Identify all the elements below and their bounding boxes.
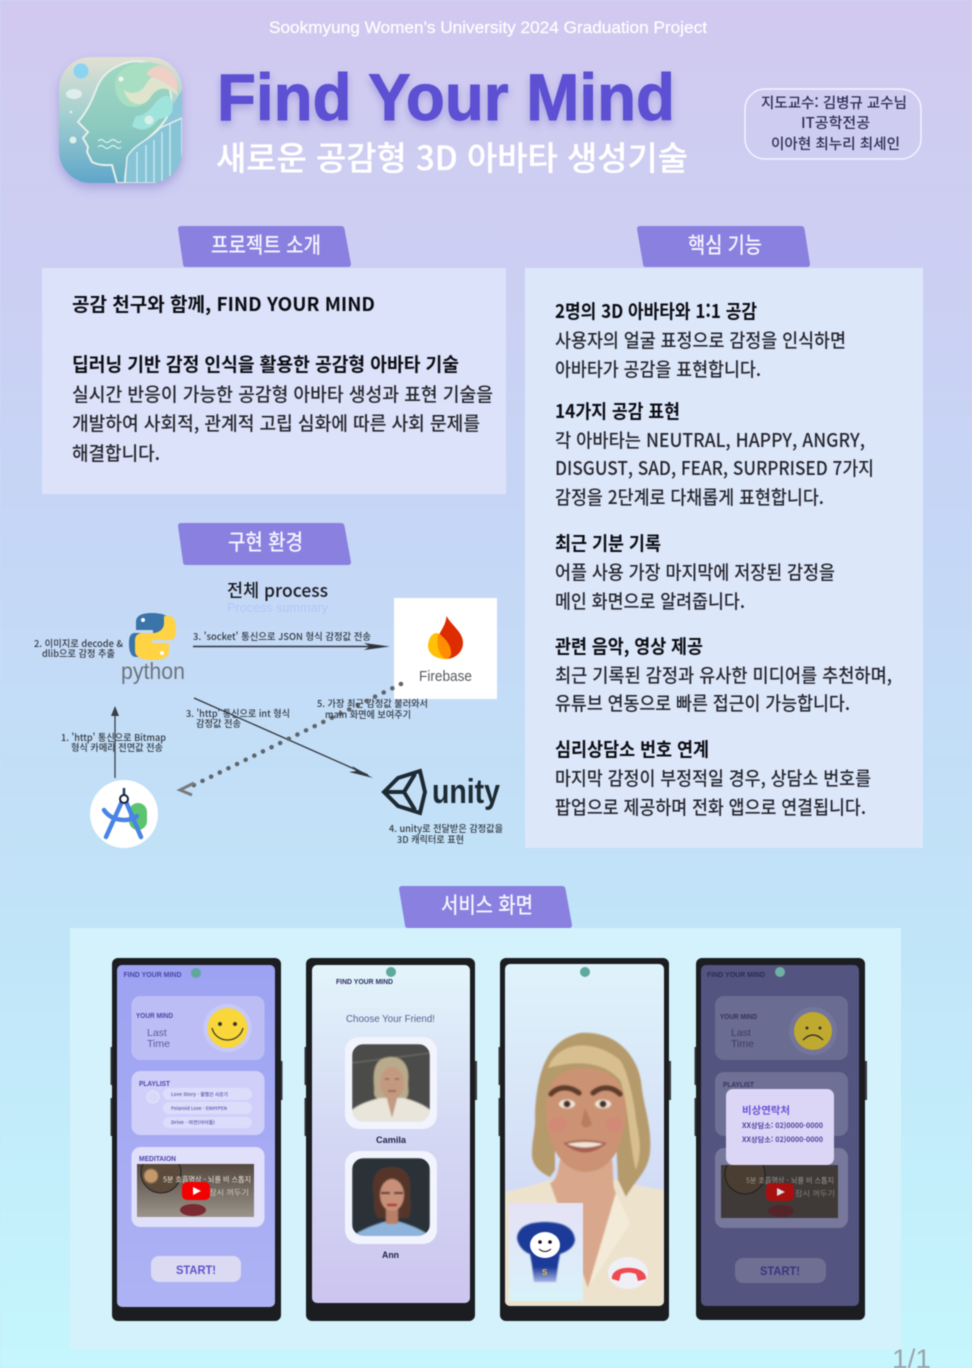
heading tab: implementation environment: 구현 환경 — [228, 525, 303, 557]
phone 4: emergency contact popup: FIND YOUR MIND — [707, 972, 765, 979]
card: your mind dimmed — [715, 996, 848, 1060]
panel: key features: 심리상담소 번호 연계 — [555, 735, 709, 762]
self-view with mascot — [509, 1203, 583, 1301]
panel: key features: 2명의 3D 아바타와 1:1 공감 — [555, 297, 757, 324]
panel: project intro: 개발하여 사회적, 관계적 고립 심화에 따른 사회 문제를 — [72, 409, 480, 436]
card: playlist — [132, 1071, 264, 1135]
card: your mind: Last — [147, 1027, 167, 1039]
panel: key features — [525, 268, 923, 848]
advisor and team box: IT공학전공 — [801, 112, 870, 133]
self-view with mascot: S — [542, 1268, 548, 1277]
label: decode — [34, 636, 123, 660]
video thumbnail: 잠시 꺼두기 — [209, 1187, 249, 1198]
heading tab: service screens — [399, 886, 572, 928]
panel: key features: 사용자의 얼굴 표정으로 감정을 인식하면 — [555, 326, 846, 353]
card: meditation: MEDITAION — [139, 1156, 176, 1163]
card: meditation dimmed: 5분 호흡명상 - 뇌를 비 스톱지 — [746, 1175, 834, 1186]
popup: emergency contacts: XX상담소: 02)0000-0000 — [742, 1135, 823, 1145]
heading tab: implementation environment — [178, 523, 351, 565]
card: playlist: PLAYLIST — [139, 1081, 171, 1088]
card: meditation dimmed: 잠시 꺼두기 — [795, 1188, 835, 1199]
card: your mind: YOUR MIND — [136, 1013, 173, 1020]
panel: key features: 감정을 2단계로 다채롭게 표현합니다. — [555, 483, 824, 510]
heading tab: project intro — [178, 226, 351, 267]
panel: key features: 아바타가 공감을 표현합니다. — [555, 355, 761, 382]
avatar — [505, 1033, 664, 1306]
diagram heading: 전체 process — [227, 577, 328, 603]
label: Ann: Ann — [382, 1250, 399, 1260]
button: end call — [608, 1257, 648, 1289]
label: bitmap: 형식 카메라 전면값 전송 — [71, 740, 163, 754]
card: playlist: Drive - 미연(아이들) — [171, 1119, 215, 1126]
panel: project intro: 딥러닝 기반 감정 인식을 활용한 공감형 아바타 기술 — [72, 350, 459, 377]
advisor and team box — [745, 89, 921, 159]
label: Camila: Camila — [376, 1135, 407, 1145]
panel: project intro: 실시간 반응이 가능한 공감형 아바타 생성과 표현 기술을 — [72, 380, 493, 407]
heading tab: service screens: 서비스 화면 — [441, 888, 533, 920]
panel: project intro — [42, 268, 506, 494]
card: meditation dimmed — [715, 1148, 848, 1228]
label: latest value: main 화면에 보여주기 — [325, 707, 411, 721]
heading tab: key features — [637, 226, 810, 267]
popup: emergency contacts: 비상연락처 — [742, 1102, 790, 1117]
diagram: overall process — [34, 577, 503, 848]
panel: service screens — [70, 928, 901, 1350]
arrow: android to python — [111, 706, 119, 778]
icon: android studio — [90, 780, 158, 848]
avatar card: Camila — [345, 1037, 437, 1129]
diagram subheading: Process summary — [227, 600, 328, 615]
label: decode: dlib으로 감정 추출 — [42, 646, 115, 660]
panel: key features: 최근 기분 기록 — [555, 529, 661, 556]
video thumbnail — [136, 1163, 255, 1218]
label: unity expression — [389, 821, 503, 846]
label: http int: 감정값 전송 — [196, 716, 241, 730]
label: unity expression: 3D 캐릭터로 표현 — [397, 832, 464, 846]
card: your mind dimmed: Last — [731, 1027, 751, 1039]
advisor and team box: 이아현 최누리 최세인 — [771, 133, 900, 154]
arrow: python to unity — [194, 698, 373, 778]
arrow: python to firebase — [193, 643, 390, 650]
phone 2: choose friend: FIND YOUR MIND — [336, 979, 393, 986]
phone 2: choose friend: Choose Your Friend! — [346, 1014, 435, 1025]
popup: emergency contacts: XX상담소: 02)0000-0000 — [742, 1121, 823, 1131]
card: your mind: Time — [147, 1038, 170, 1050]
panel: project intro: 공감 천구와 함께, FIND YOUR MIND — [72, 290, 375, 317]
card: meditation — [132, 1147, 264, 1227]
label: http int — [186, 706, 290, 730]
card: playlist: Polaroid Love - ENHYPEN — [171, 1105, 227, 1112]
panel: key features: 마지막 감정이 부정적일 경우, 상담소 번호를 — [555, 764, 871, 791]
icon: firebase: Firebase — [419, 669, 472, 685]
icon: app logo with head profile — [59, 57, 182, 183]
label: bitmap: 1. 'http' 통신으로 Bitmap — [61, 730, 166, 744]
icon: firebase — [394, 598, 497, 699]
title: Find Your Mind — [217, 60, 675, 134]
card: your mind — [132, 996, 264, 1060]
phone 2: choose friend — [304, 958, 477, 1321]
panel: key features: 각 아바타는 NEUTRAL, HAPPY, ANGRY, — [555, 426, 865, 453]
panel: key features: 최근 기록된 감정과 유사한 미디어를 추천하며, — [555, 661, 892, 688]
panel: key features: 14가지 공감 표현 — [555, 397, 680, 424]
panel: key features: 유튜브 연동으로 빠른 접근이 가능합니다. — [555, 689, 850, 716]
panel: key features: 메인 화면으로 알려줍니다. — [555, 587, 745, 614]
panel: key features: 어플 사용 가장 마지막에 저장된 감정을 — [555, 558, 835, 585]
card: playlist dimmed — [715, 1072, 848, 1136]
popup: emergency contacts — [726, 1089, 834, 1165]
panel: key features: 팝업으로 제공하며 전화 앱으로 연결됩니다. — [555, 793, 866, 820]
card: playlist: Love Story - 볼빨간 사춘기 — [171, 1091, 228, 1098]
label: latest value: 5. 가장 최근 감정값 불러와서 — [317, 696, 428, 710]
arrow: firebase to android dotted — [180, 684, 401, 795]
button: start dimmed: START! — [760, 1264, 800, 1278]
icon: unity: unity — [432, 773, 500, 811]
card: playlist dimmed: PLAYLIST — [723, 1082, 755, 1089]
panel: key features: 관련 음악, 영상 제공 — [555, 632, 703, 659]
panel: key features: DISGUST, SAD, FEAR, SURPRISED 7가지 — [555, 454, 874, 481]
icon: python — [121, 613, 185, 684]
label: decode: 2. 이미지로 decode & — [34, 636, 123, 650]
button: start — [151, 1256, 241, 1282]
phone 1: main screen — [110, 958, 282, 1321]
button: start: START! — [176, 1263, 216, 1277]
label: bitmap — [61, 730, 166, 754]
avatar card: Ann — [345, 1151, 437, 1244]
button: start dimmed — [735, 1258, 826, 1283]
header: project caption: Sookmyung Women's University 2024 Graduation Project — [269, 19, 707, 37]
phone 3: avatar video call — [498, 958, 671, 1321]
heading tab: project intro: 프로젝트 소개 — [211, 228, 321, 260]
panel: project intro: 해결합니다. — [72, 439, 160, 466]
label: unity expression: 4. unity로 전달받은 감정값을 — [389, 821, 503, 835]
icon: unity — [384, 771, 500, 813]
heading tab: key features: 핵심 기능 — [688, 228, 762, 260]
advisor and team box: 지도교수: 김병규 교수님 — [761, 92, 907, 113]
label: socket: 3. 'socket' 통신으로 JSON 형식 감정값 전송 — [193, 629, 371, 643]
label: latest value — [317, 696, 428, 721]
video thumbnail: 5분 호흡명상 - 뇌를 비 스톱지 — [163, 1174, 251, 1185]
phone 4: emergency contact popup — [694, 958, 867, 1320]
icon: python: python — [121, 658, 185, 684]
subtitle: 새로운 공감형 3D 아바타 생성기술 — [216, 132, 688, 180]
card: your mind dimmed: Time — [731, 1038, 754, 1050]
card: your mind dimmed: YOUR MIND — [720, 1014, 757, 1021]
phone 1: main screen: FIND YOUR MIND — [124, 972, 182, 979]
label: http int: 3. 'http' 통신으로 int 형식 — [186, 706, 290, 720]
